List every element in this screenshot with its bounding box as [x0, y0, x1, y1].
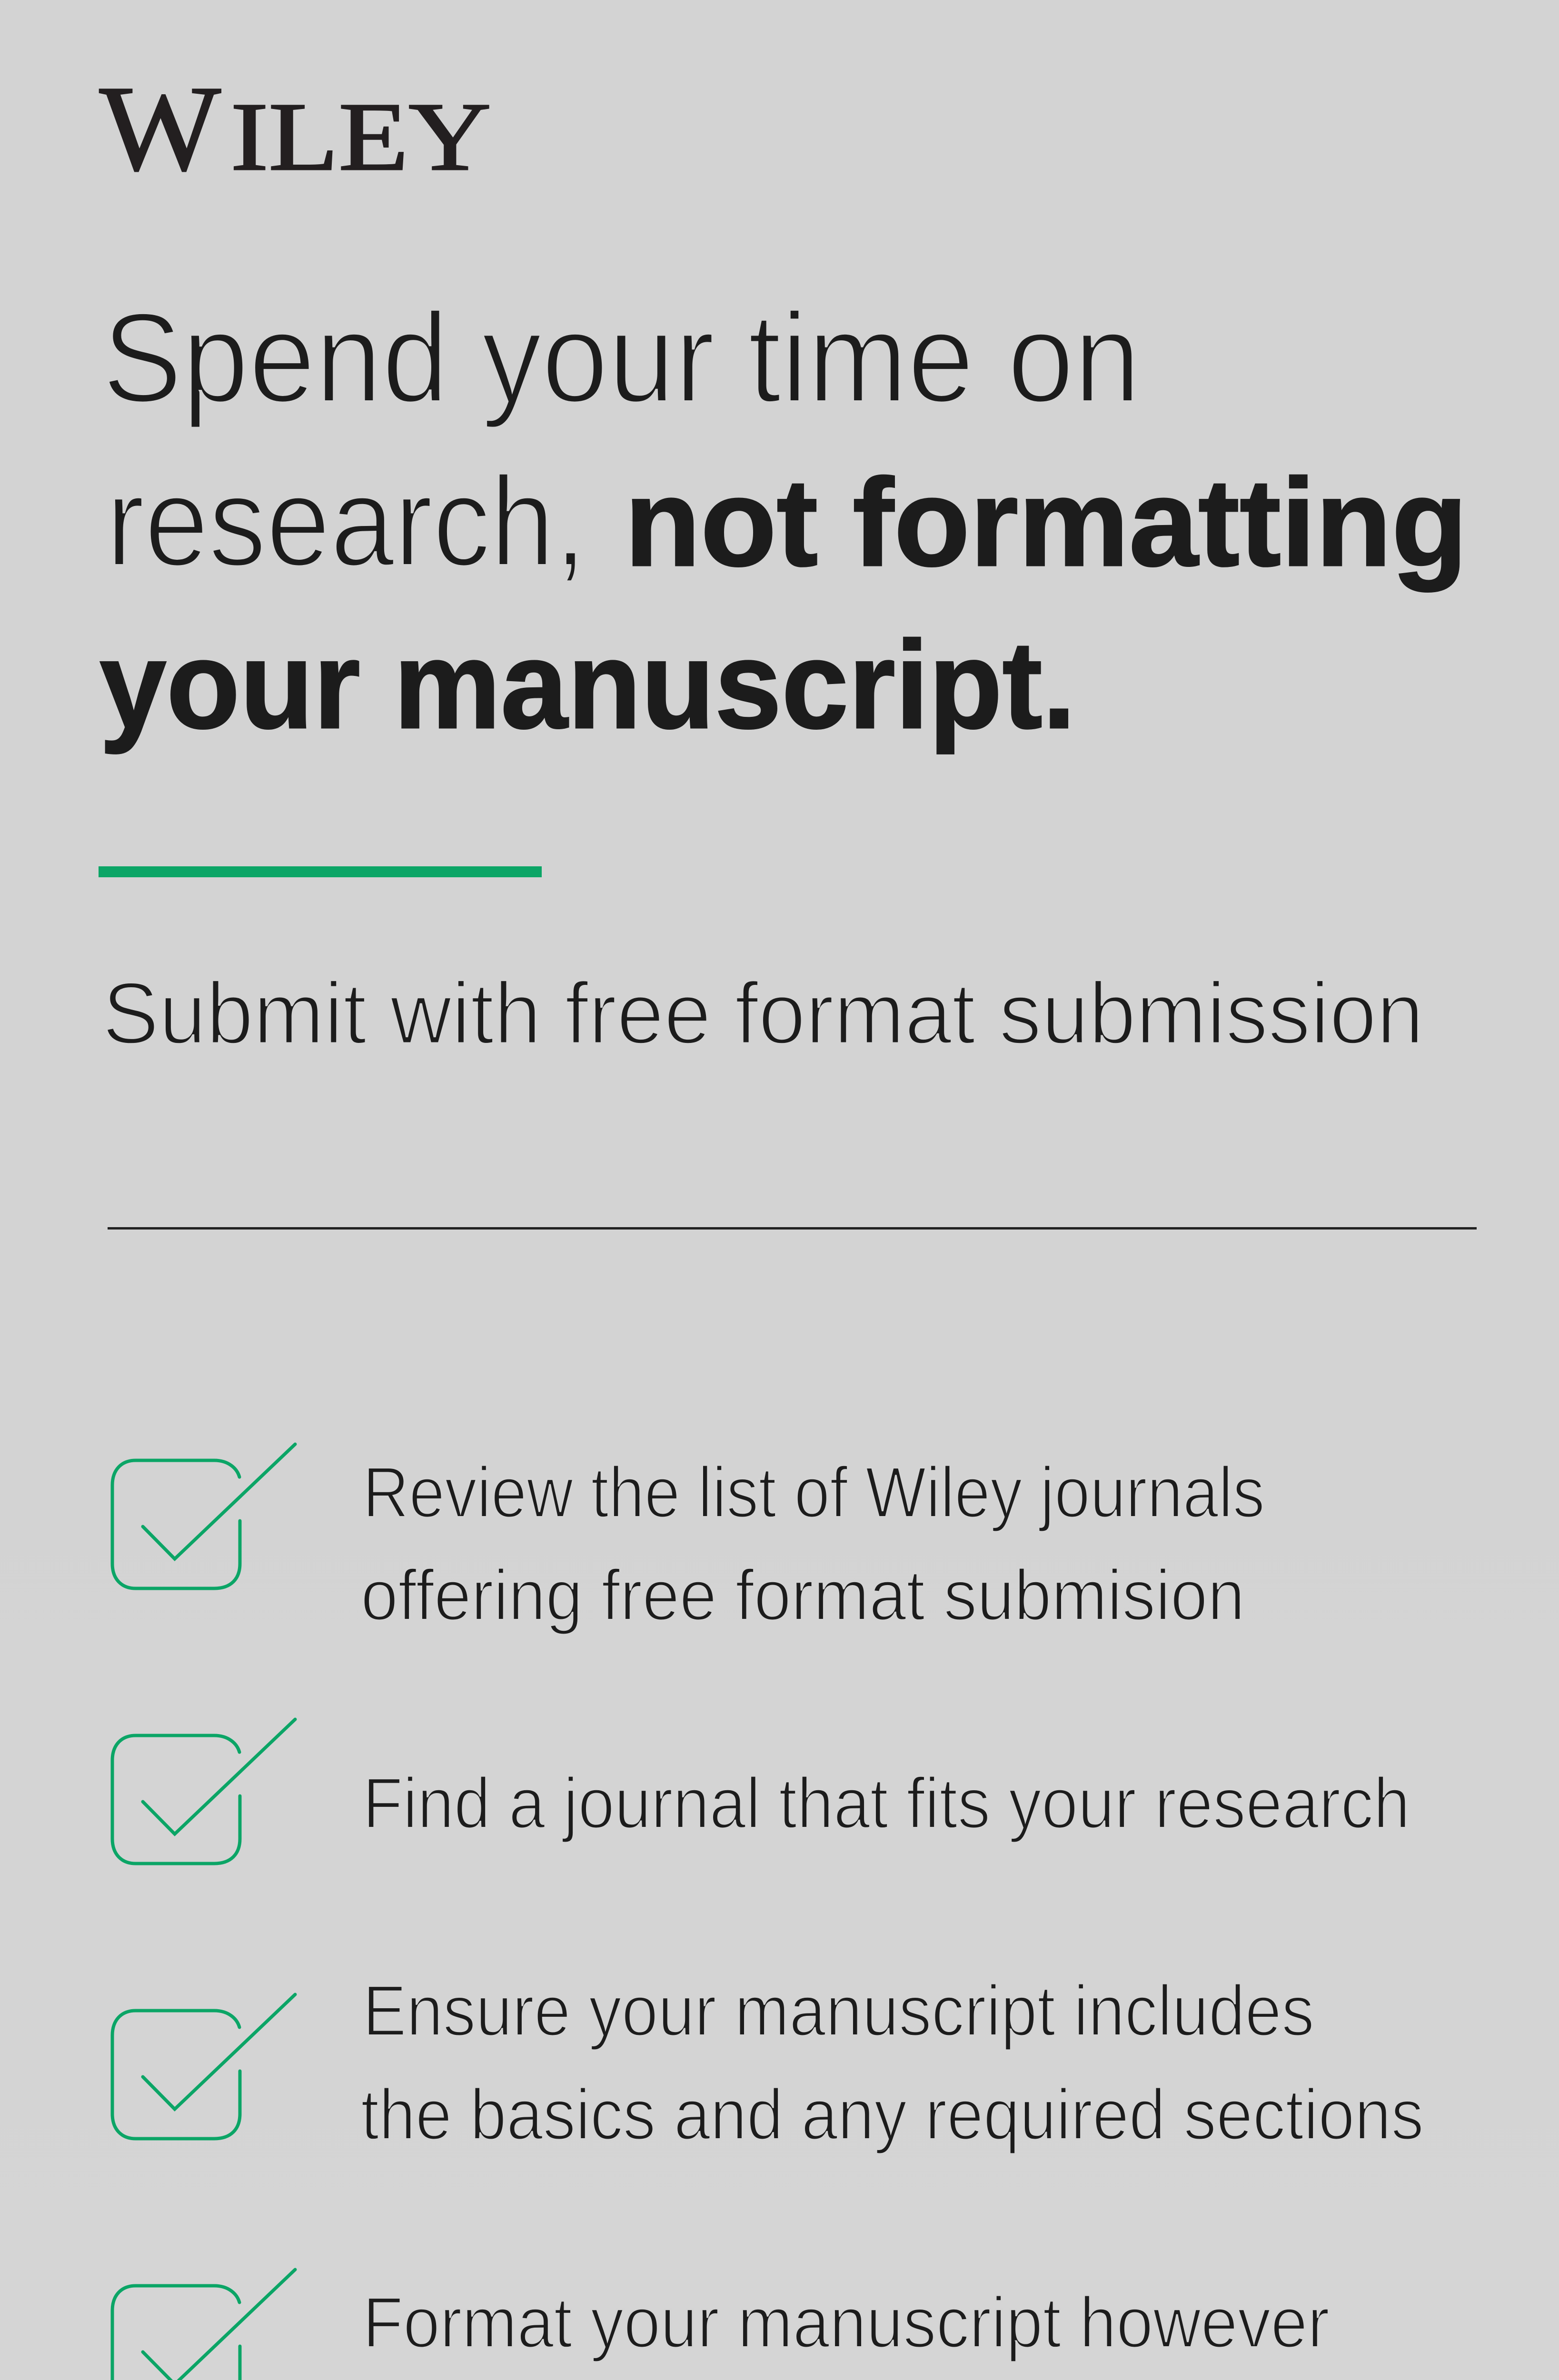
- checklist item 2: [112, 1719, 1410, 1864]
- text: step 4: Format your manuscript however: [363, 2282, 1330, 2362]
- icon: checkbox 4: [112, 2270, 295, 2380]
- subtitle: Submit with free format submission: [102, 964, 1424, 1062]
- title: Spend your time on: [102, 286, 1141, 430]
- text: step 3: [361, 1970, 1424, 2154]
- text: step 3: the basics and any required sections: [361, 2074, 1424, 2154]
- logo: Wiley: W: [99, 60, 222, 196]
- title: research,: [106, 450, 586, 593]
- title: [99, 286, 1468, 755]
- divider line: [108, 1227, 1477, 1230]
- text: step 1: [361, 1452, 1265, 1635]
- logo: Wiley: [99, 60, 491, 196]
- text: step 1: Review the list of Wiley journals: [363, 1452, 1265, 1532]
- text: step 1: offering free format submision: [361, 1555, 1245, 1635]
- text: step 3: Ensure your manuscript includes: [363, 1970, 1314, 2051]
- checklist: [112, 1444, 1424, 2380]
- checklist item 4: [112, 2270, 1330, 2380]
- green accent rule: [99, 866, 542, 877]
- title: not formatting: [625, 453, 1468, 593]
- icon: checkbox 3: [112, 1994, 295, 2139]
- checklist item 1: [112, 1444, 1265, 1635]
- icon: checkbox 2: [112, 1719, 295, 1864]
- icon: checkbox 1: [112, 1444, 295, 1588]
- text: step 2: Find a journal that fits your research: [363, 1763, 1410, 1843]
- logo: Wiley: ILEY: [230, 83, 491, 191]
- title: your manuscript.: [99, 615, 1076, 755]
- checklist item 3: [112, 1970, 1424, 2154]
